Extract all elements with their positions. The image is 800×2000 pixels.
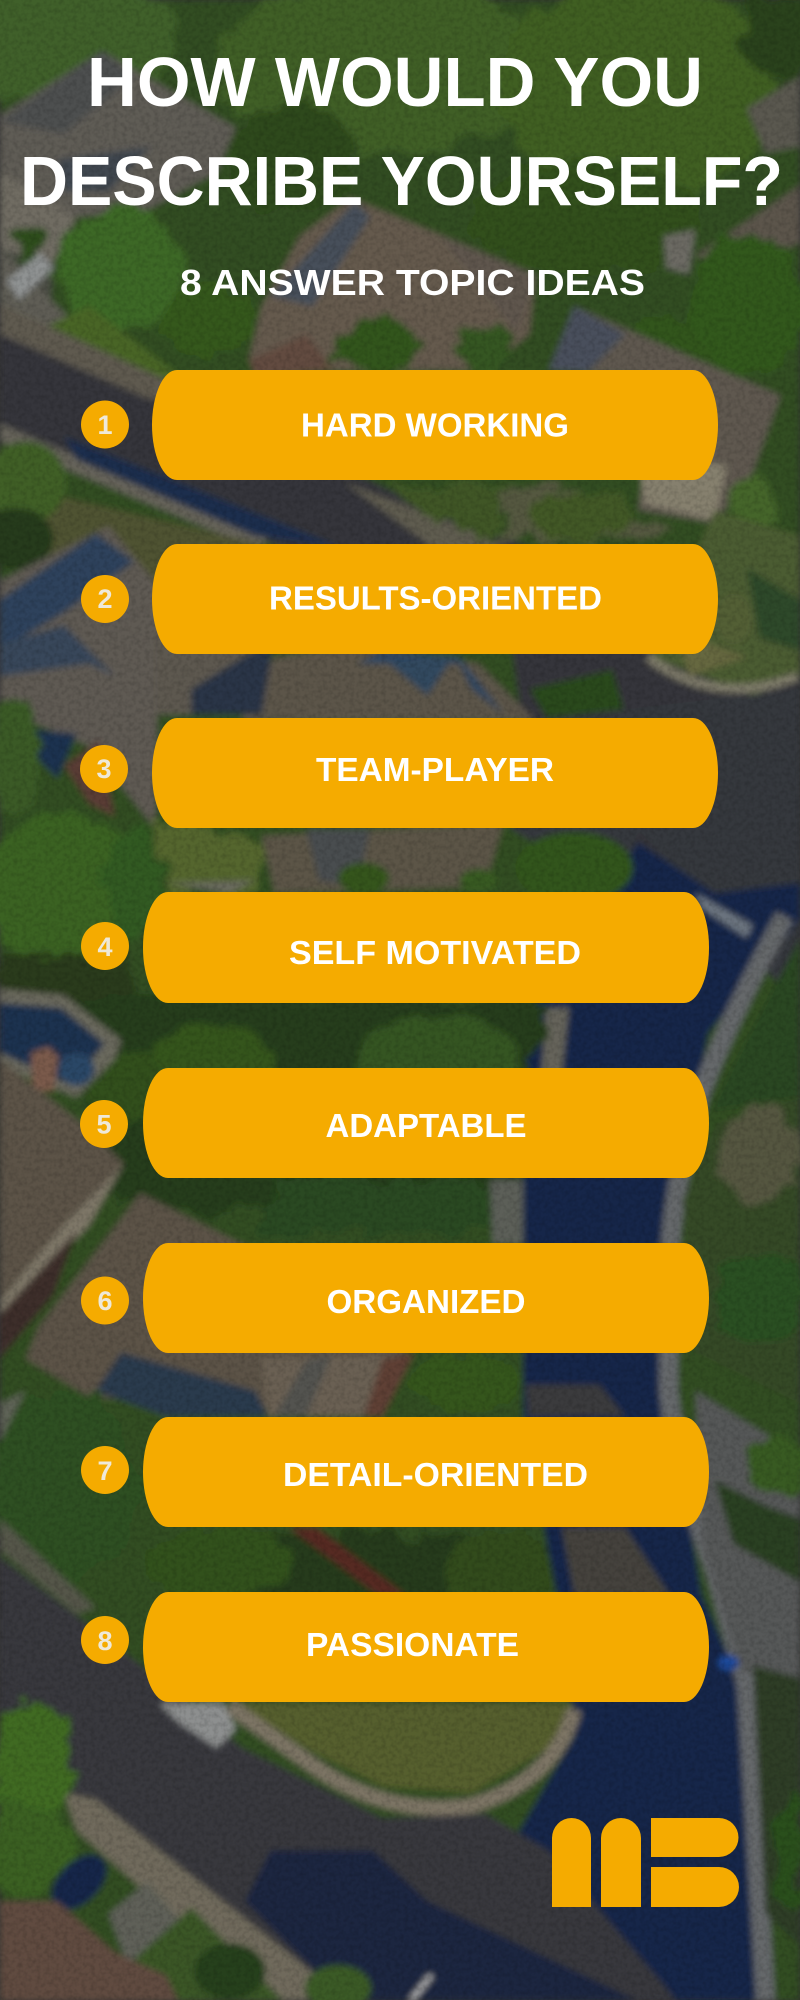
pool <box>0 989 121 1097</box>
item 6 pill <box>143 1243 709 1353</box>
item 6 number badge <box>81 1276 129 1324</box>
trees before central house <box>332 322 518 373</box>
sidewalk right <box>669 916 785 2000</box>
lawn <box>48 306 217 421</box>
trees around central house <box>10 209 800 383</box>
item 4 number badge: 4 <box>97 932 113 962</box>
bottom left driveway and car <box>41 1844 371 2000</box>
island lawn with curb <box>160 1703 574 1808</box>
roof bottom centre <box>26 1193 415 1416</box>
navy road right <box>421 1148 766 2000</box>
top tree canopy <box>0 0 800 274</box>
item 1 pill: HARD WORKING <box>301 408 569 444</box>
item 1 pill <box>152 370 718 480</box>
left house low <box>0 1059 124 1359</box>
item 4 pill: SELF MOTIVATED <box>289 935 581 972</box>
item 5 pill: ADAPTABLE <box>326 1108 526 1145</box>
item 1 number badge <box>81 400 129 448</box>
right lawns and trees <box>683 938 800 1946</box>
sidewalk and street <box>0 304 800 919</box>
item 3 pill: TEAM-PLAYER <box>316 752 554 789</box>
item 5 number badge: 5 <box>96 1110 112 1140</box>
stop marking <box>411 1975 431 2000</box>
title: HOW WOULD YOU <box>87 43 703 121</box>
fence and path <box>0 1180 523 1614</box>
street curve right <box>510 689 800 1212</box>
right side trees <box>715 1104 800 1909</box>
central house roof <box>249 198 536 376</box>
mid left dark trees <box>0 957 542 1212</box>
item 2 pill: RESULTS-ORIENTED <box>269 580 602 618</box>
item 5 pill <box>143 1068 709 1178</box>
central house behind pills <box>191 638 625 721</box>
item 6 number badge: 6 <box>97 1286 113 1316</box>
bottom left roof <box>0 1901 179 2000</box>
item 6 pill: ORGANIZED <box>326 1284 526 1321</box>
item 2 number badge: 2 <box>97 584 113 614</box>
item 3 number badge <box>80 745 128 793</box>
right lawn with curb <box>648 510 800 695</box>
left large house <box>0 526 274 829</box>
title <box>20 43 783 220</box>
item 8 pill <box>143 1592 709 1702</box>
item 8 number badge <box>81 1616 129 1664</box>
chimney <box>31 1046 59 1091</box>
item 8 pill: PASSIONATE <box>306 1627 519 1664</box>
subtitle: 8 ANSWER TOPIC IDEAS <box>180 262 645 303</box>
house top right <box>664 77 800 274</box>
title: DESCRIBE YOURSELF? <box>20 142 783 220</box>
item 8 number badge: 8 <box>97 1626 113 1656</box>
bottom road <box>0 1557 676 2000</box>
item 7 number badge <box>81 1446 129 1494</box>
left lawn and tree <box>0 441 281 600</box>
item 7 number badge: 7 <box>97 1456 113 1486</box>
bottom left tree <box>0 1701 71 1896</box>
item 4 number badge <box>81 922 129 970</box>
item 7 pill: DETAIL-ORIENTED <box>283 1457 588 1494</box>
house top left <box>0 51 236 300</box>
item 2 number badge <box>81 575 129 623</box>
mid trees <box>0 1180 581 1610</box>
house right <box>549 306 781 523</box>
item 2 pill <box>152 544 718 654</box>
item 7 pill <box>143 1417 709 1527</box>
item 4 pill <box>143 892 709 1003</box>
tree left under pills <box>0 694 262 970</box>
driveway and parked car <box>0 249 77 345</box>
item 5 number badge <box>80 1100 128 1148</box>
item 3 number badge: 3 <box>96 754 112 784</box>
garden beside the house <box>383 476 776 542</box>
lower roof <box>166 823 633 903</box>
item 1 number badge: 1 <box>97 410 113 440</box>
item 3 pill <box>152 718 718 828</box>
bottom left sidewalk <box>64 1793 319 2000</box>
logo: MB mark <box>552 1818 739 1907</box>
